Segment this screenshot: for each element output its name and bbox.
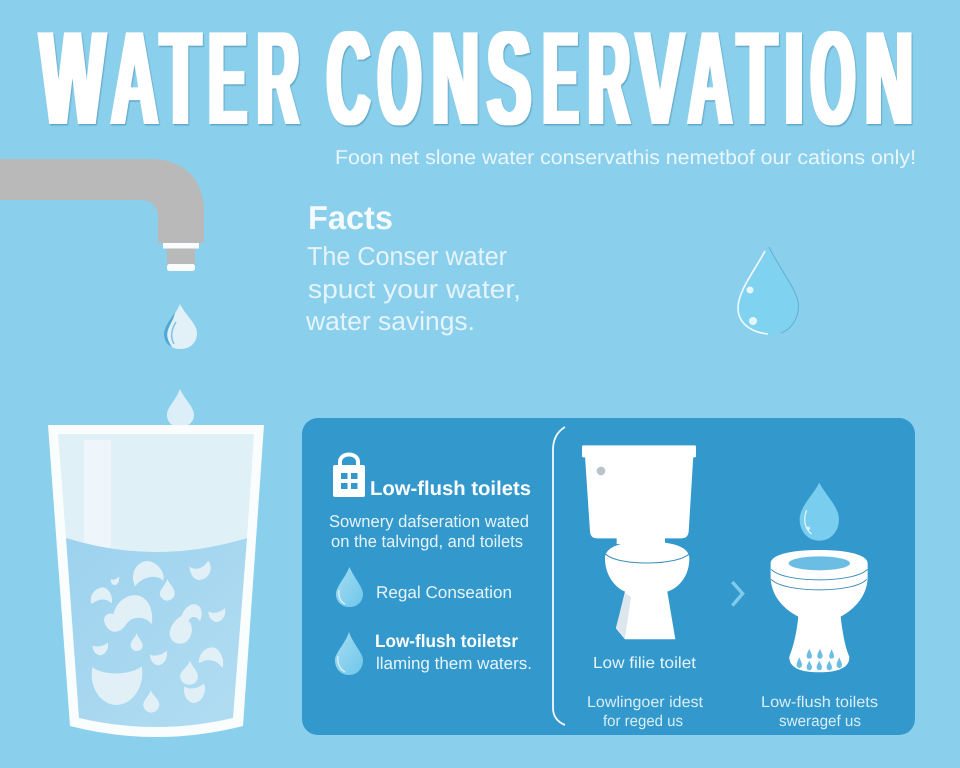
icon: standard toilet: [582, 445, 696, 639]
icon: bullet drop 1: [336, 567, 363, 607]
title: N: [432, 2, 479, 154]
text block: facts: The Conser water: [307, 241, 507, 271]
title: C: [327, 2, 370, 154]
title: E: [208, 2, 246, 154]
caption: standard toilet: for reged us: [603, 713, 683, 730]
bullet label 1: Regal Conseation: [376, 583, 512, 602]
caption: standard toilet: Lowlingoer idest: [587, 694, 704, 711]
title: R: [588, 2, 630, 154]
panel description: [329, 512, 529, 551]
caption: standard toilet: [587, 694, 704, 730]
label: standard toilet: Low filie toilet: [593, 655, 697, 672]
icon: drop above glass: [167, 389, 194, 427]
bullet label 2: [375, 631, 532, 673]
icon: faucet: [0, 159, 204, 271]
icon: low-flush toilet: [771, 550, 868, 672]
title: A: [111, 2, 158, 154]
caption: low-flush toilet: [761, 694, 878, 730]
icon: drop above low-flush toilet: [800, 483, 839, 541]
panel description: Sownery dafseration wated: [329, 512, 529, 531]
icon: glass of water: [48, 425, 264, 737]
bullet label 2: llaming them waters.: [376, 654, 532, 673]
text block: facts: spuct your water,: [308, 274, 521, 304]
icon: bullet drop 2: [335, 632, 363, 675]
panel: low-flush toilets: [302, 418, 915, 735]
bracket divider: [553, 427, 565, 725]
water bubbles: [91, 561, 225, 713]
panel description: on the talvingd, and toilets: [331, 532, 523, 551]
icon: lock: [333, 454, 365, 497]
arrow: [732, 582, 743, 606]
title: R: [257, 2, 299, 154]
text block: facts: water savings.: [305, 306, 475, 336]
icon: falling water drop: [164, 304, 197, 349]
caption: low-flush toilet: Low-flush toilets: [761, 694, 878, 711]
bullet label 2: Low-flush toiletsr: [375, 631, 518, 651]
title: T: [738, 2, 776, 154]
title: I: [784, 2, 804, 154]
icon: large water drop: [737, 247, 799, 335]
title: A: [688, 2, 732, 154]
text block: facts: [305, 241, 521, 336]
title: T: [160, 2, 200, 154]
title: V: [636, 2, 684, 154]
title: O: [811, 2, 855, 154]
title: S: [487, 2, 531, 154]
title: O: [378, 2, 421, 154]
panel heading: Low-flush toilets: [370, 478, 531, 500]
title: W: [40, 2, 105, 154]
title: E: [543, 2, 578, 154]
subtitle: Foon net slone water conservathis nemetbof our cations only!: [335, 147, 916, 169]
caption: low-flush toilet: sweragef us: [779, 713, 861, 730]
heading: facts: Facts: [308, 199, 393, 236]
